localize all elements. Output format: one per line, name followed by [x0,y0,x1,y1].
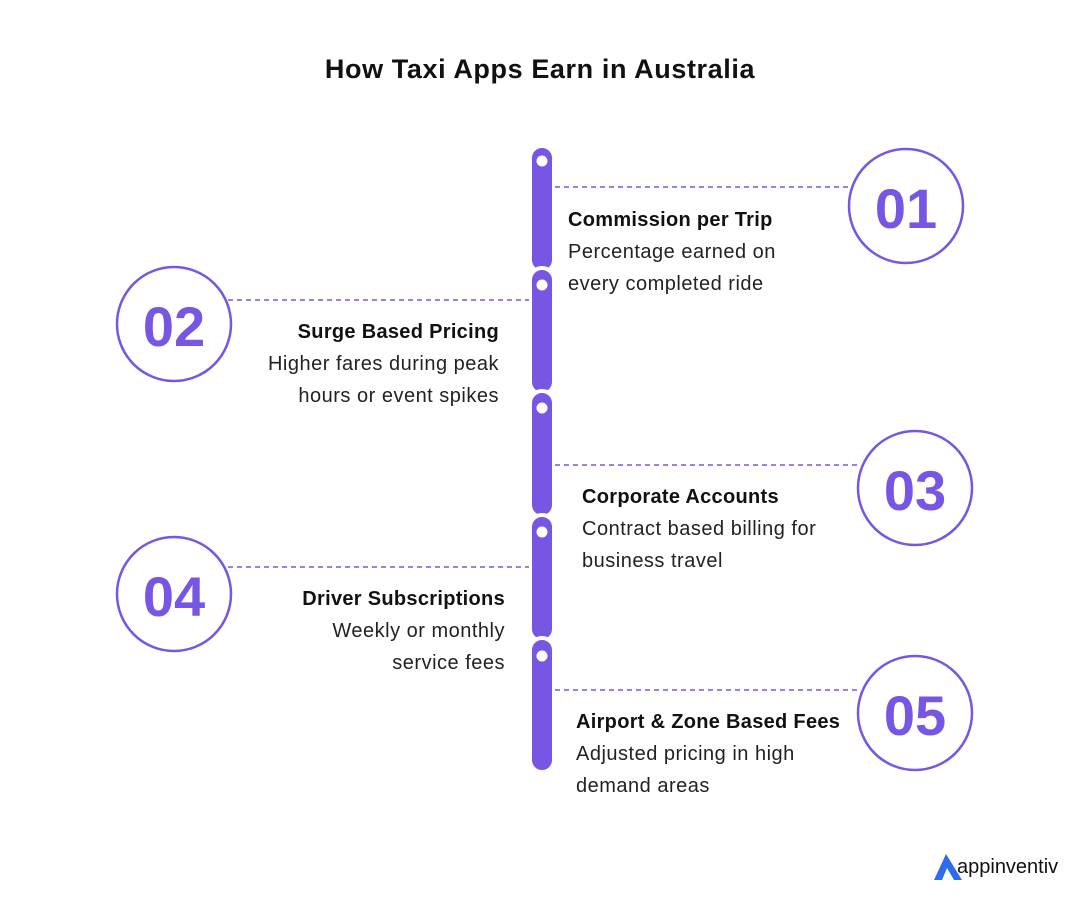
item 02: Higher fares during peak [268,353,499,375]
item 05: Airport & Zone Based Fees [576,711,840,733]
item 01: every completed ride [568,273,764,295]
connector lines [228,187,860,690]
title: How Taxi Apps Earn in Australia [325,54,755,84]
logo [934,854,1058,880]
item 03 [582,431,972,572]
item 01: Percentage earned on [568,241,776,263]
item 04: service fees [392,652,505,674]
item 02: hours or event spikes [298,385,499,407]
item 05: demand areas [576,775,710,797]
item 03: 03 [884,459,946,522]
item 01 [568,149,963,295]
item 03: business travel [582,550,723,572]
item 02 [117,267,499,407]
item 05: Adjusted pricing in high [576,743,795,765]
item 05: 05 [884,684,946,747]
item 04: 04 [143,565,205,628]
item 04: Weekly or monthly [332,620,505,642]
timeline bar [530,146,554,772]
item 05 [576,656,972,797]
item 02: 02 [143,295,205,358]
item 03: Contract based billing for [582,518,816,540]
logo: appinventiv [957,856,1058,878]
item 02: Surge Based Pricing [298,321,499,343]
item 04 [117,537,505,674]
item 03: Corporate Accounts [582,486,779,508]
item 01: 01 [875,177,937,240]
item 01: Commission per Trip [568,209,773,231]
item 04: Driver Subscriptions [302,588,505,610]
